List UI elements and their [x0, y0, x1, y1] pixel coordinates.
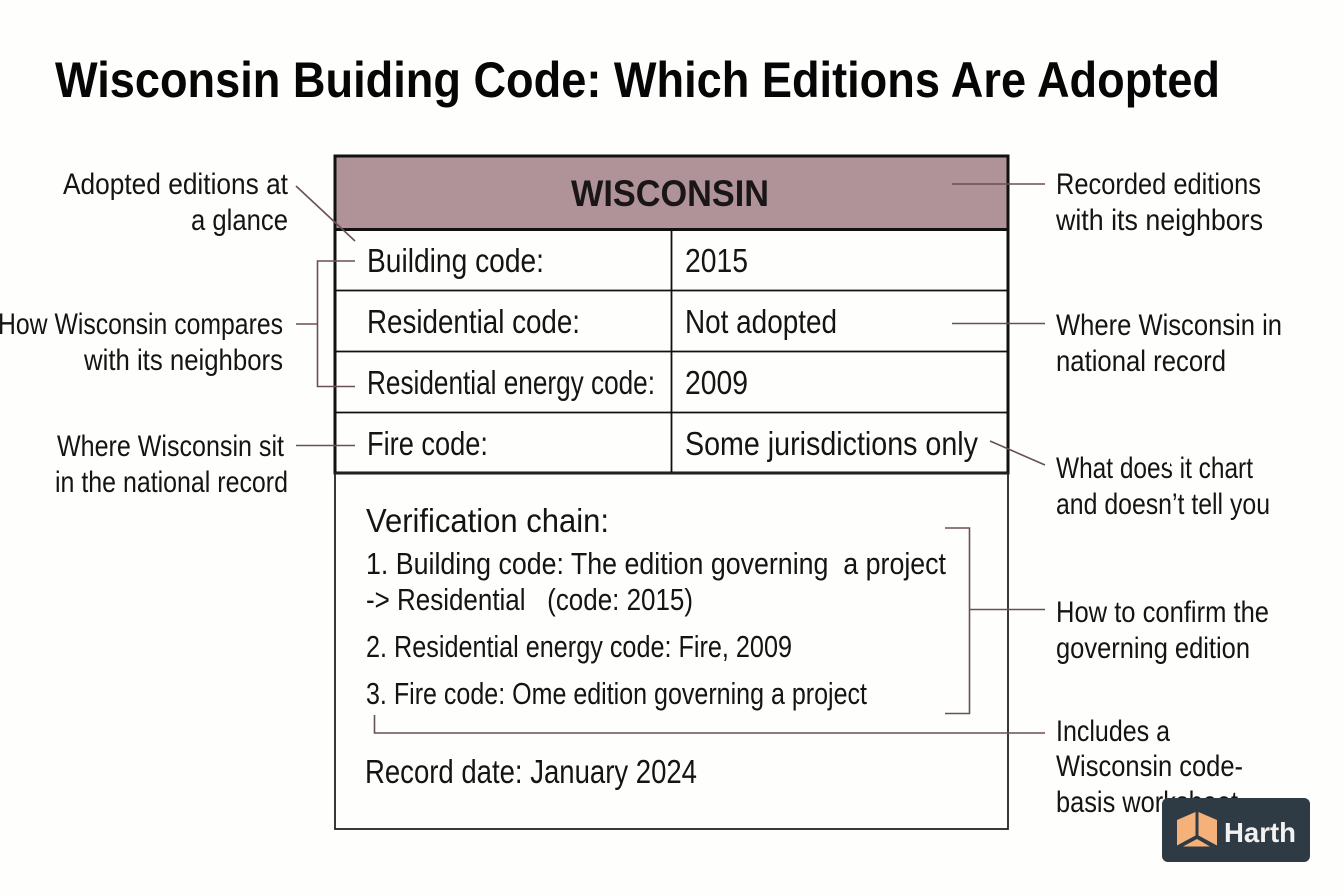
- callout: recorded editions: with its neighbors: [1055, 204, 1263, 237]
- callout: where Wisconsin in national record: [952, 309, 1282, 378]
- callout: how to confirm: governing edition: [1056, 632, 1250, 665]
- callout: worksheet: Includes a: [1056, 715, 1170, 748]
- logo badge: Harth: Harth: [1224, 817, 1296, 848]
- callout: where Wisconsin in national record: national record: [1056, 345, 1226, 378]
- callout: how to confirm: [945, 528, 1269, 714]
- icon: orange cube: [1177, 812, 1217, 846]
- callout: recorded editions: [952, 168, 1263, 237]
- callout: adopted editions at a glance: a glance: [191, 204, 288, 237]
- row: residential energy code: Residential energy code:: [367, 364, 655, 401]
- callout: worksheet: [374, 715, 1243, 819]
- row: building code: 2015: [685, 242, 748, 279]
- callout: where Wisconsin sit: in the national record: [55, 466, 288, 499]
- row: building code: Building code:: [367, 242, 544, 279]
- verification step 1: -> Residential (code: 2015): [366, 582, 693, 617]
- callout: recorded editions: Recorded editions: [1056, 168, 1261, 201]
- panel: Wisconsin code table: [335, 156, 1008, 473]
- table grid: [335, 156, 1008, 473]
- callout: what does it chart: and doesn’t tell you: [1056, 488, 1270, 521]
- callout: how Wisconsin compares: [0, 261, 355, 386]
- row: fire code: Fire code:: [367, 425, 488, 462]
- row: residential code: [367, 303, 837, 340]
- callout: where Wisconsin in national record: Where Wisconsin in: [1056, 309, 1282, 342]
- callout: what does it chart: What does it chart: [1056, 452, 1254, 485]
- row: residential energy code: 2009: [685, 364, 748, 401]
- panel: verification chain: [335, 473, 1008, 829]
- callout: where Wisconsin sit: Where Wisconsin sit: [57, 430, 285, 463]
- verification heading: Verification chain:: [366, 502, 609, 539]
- callout: how to confirm: How to confirm the: [1056, 596, 1269, 629]
- row: fire code: [367, 425, 978, 462]
- callout: where Wisconsin sit: [55, 430, 355, 499]
- row: residential code: Not adopted: [685, 303, 837, 340]
- verification step 3: 3. Fire code: Ome edition governing a project: [366, 676, 867, 711]
- callout: adopted editions at a glance: [63, 168, 355, 241]
- row: building code: [367, 242, 748, 279]
- verification step 2: 2. Residential energy code: Fire, 2009: [366, 629, 792, 664]
- verification step 1: [366, 546, 946, 617]
- callout: worksheet: basis worksheet: [1056, 786, 1239, 819]
- logo badge: Harth: [1162, 798, 1310, 862]
- callout: adopted editions at a glance: Adopted editions at: [63, 168, 289, 201]
- table header: WISCONSIN: [571, 173, 769, 214]
- verification step 1: 1. Building code: The edition governing a project: [366, 546, 946, 581]
- callout: what does it chart: [990, 441, 1270, 521]
- callout: how Wisconsin compares: How Wisconsin compares: [0, 308, 283, 341]
- title: Wisconsin Buiding Code: Which Editions Are Adopted: [55, 52, 1220, 108]
- callout: how Wisconsin compares: with its neighbors: [83, 344, 283, 377]
- callout: worksheet: Wisconsin code-: [1056, 750, 1243, 783]
- record date: Record date: January 2024: [365, 753, 697, 790]
- row: fire code: Some jurisdictions only: [685, 425, 978, 462]
- table header: [335, 156, 1008, 229]
- row: residential code: Residential code:: [367, 303, 580, 340]
